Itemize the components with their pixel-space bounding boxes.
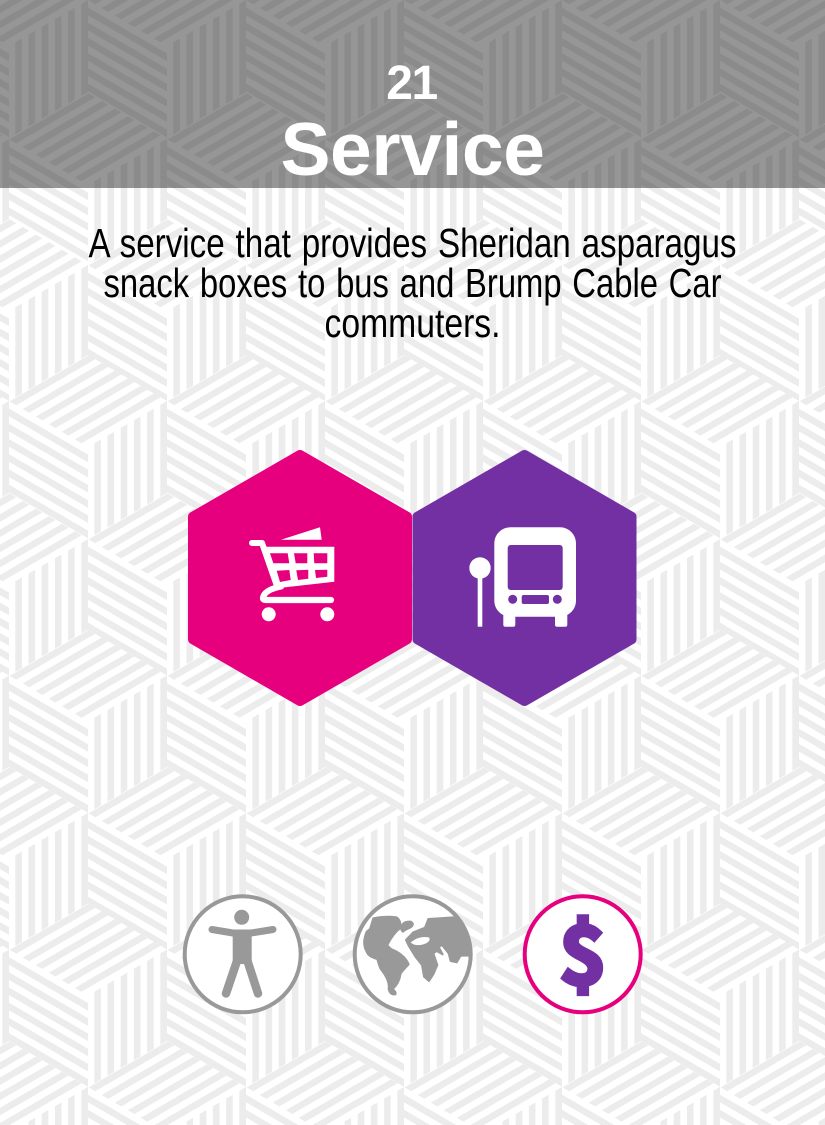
title: Service: [280, 107, 545, 191]
badge: globe: [355, 896, 475, 1012]
hexagon: shopping cart: [193, 455, 407, 701]
hexagon: bus stop: [418, 455, 632, 701]
badge: accessibility person: [185, 896, 301, 1012]
description text: [88, 220, 736, 346]
badge: dollar: $: [559, 892, 606, 1008]
icon: shopping cart: [252, 527, 334, 621]
card number: 21: [386, 57, 438, 110]
icon: bus stop: [469, 527, 576, 627]
description text: commuters.: [324, 300, 500, 346]
header band: [0, 0, 825, 188]
badge: dollar: [525, 892, 641, 1012]
